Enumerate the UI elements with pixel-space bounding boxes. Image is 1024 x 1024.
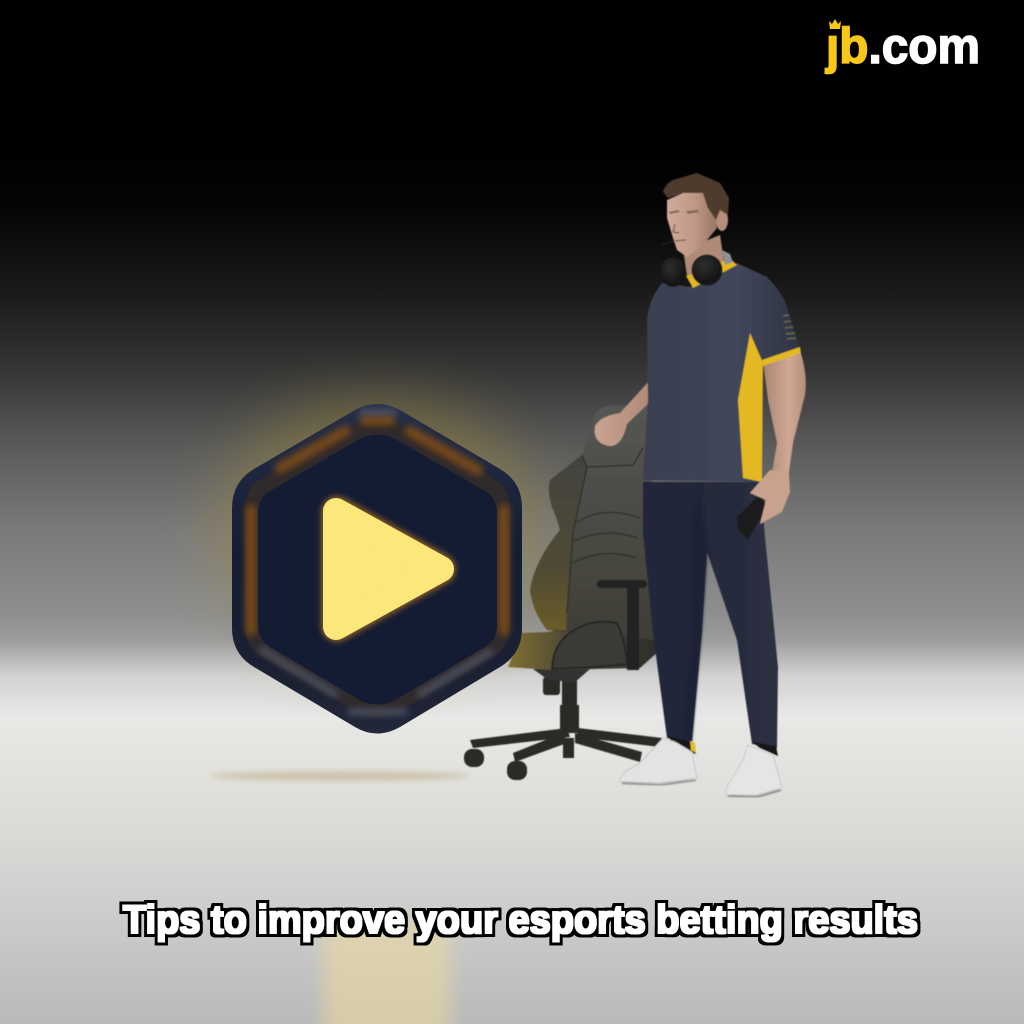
ear: [716, 209, 728, 231]
game controller: [737, 492, 766, 540]
hexagon amber bevel highlights: [251, 420, 504, 630]
chair base: [464, 677, 662, 780]
logo wordmark: jb.com: [825, 18, 980, 74]
caption: Tips to improve your esports betting results: [123, 898, 918, 942]
neck: [683, 235, 724, 285]
floor shadow of hexagon: [210, 771, 470, 781]
hexagon lower steel highlights: [262, 412, 490, 712]
headphones: [660, 254, 722, 287]
left shoe: [620, 738, 697, 783]
chair seams: [567, 448, 643, 613]
sock accent: [690, 741, 696, 753]
yellow collar: [686, 258, 737, 288]
chair armrest: [552, 580, 647, 670]
hexagon dark face: [258, 434, 497, 704]
play triangle: [336, 511, 441, 627]
hair: [663, 173, 729, 220]
headset microphone: [662, 241, 673, 245]
chair backrest: [530, 405, 655, 640]
right sock: [752, 742, 778, 756]
trouser shading: [682, 490, 708, 742]
right shoe shadow: [728, 790, 781, 797]
face: [667, 193, 717, 257]
eyes and brows: [669, 210, 699, 214]
right arm: [763, 350, 806, 472]
hexagon play icon: [232, 404, 522, 734]
chair seat: [508, 620, 660, 670]
nose shadow and mouth: [673, 224, 686, 241]
chair under-seat: [533, 669, 590, 683]
logo: jb.com: [824, 18, 980, 74]
chair bolster: [530, 455, 587, 630]
hexagon inner bevel: [245, 418, 510, 718]
logo crown: [829, 19, 841, 29]
play triangle glow: [337, 512, 440, 626]
hexagon glow: [213, 395, 543, 665]
hexagon outer rim: [232, 404, 522, 734]
right shoe: [726, 745, 782, 795]
trousers: [643, 482, 778, 748]
floor reflection of play icon: [324, 920, 450, 1024]
socks: [668, 736, 696, 754]
left shoe shadow: [622, 780, 696, 785]
man standing: [595, 173, 806, 797]
left arm and fist: [595, 380, 650, 446]
sleeve stripes: [783, 315, 796, 339]
yellow side panel: [738, 333, 763, 482]
sleeve cuff: [762, 347, 801, 366]
gaming chair: [464, 405, 662, 780]
white collar strip: [722, 250, 733, 265]
t-shirt: [643, 263, 800, 482]
hand on controller: [750, 470, 790, 524]
logo mask over j dot: [824, 18, 839, 33]
